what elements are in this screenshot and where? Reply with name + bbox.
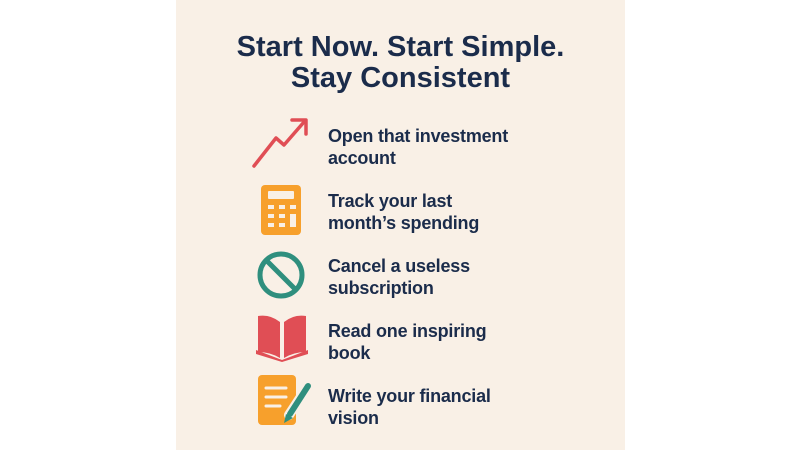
text: item 5 <box>328 386 491 428</box>
text: item 1 <box>328 126 508 168</box>
icon: document with pencil <box>258 375 308 425</box>
text: item 2: month’s spending <box>328 213 479 233</box>
text: item 4 <box>328 321 486 363</box>
icon: book <box>256 316 308 362</box>
title: Stay Consistent <box>291 62 510 94</box>
title <box>237 31 564 94</box>
text: item 5: vision <box>328 408 379 428</box>
text: item 4: Read one inspiring <box>328 321 486 341</box>
text: item 4: book <box>328 343 370 363</box>
text: item 5: Write your financial <box>328 386 491 406</box>
icon: rising arrow <box>254 120 306 166</box>
icons <box>252 118 311 425</box>
text: item 3: Cancel a useless <box>328 256 470 276</box>
text: item 2 <box>328 191 479 233</box>
text: item 3: subscription <box>328 278 434 298</box>
title: Start Now. Start Simple. <box>237 31 564 63</box>
panel: main <box>176 0 625 450</box>
text: item 2: Track your last <box>328 191 452 211</box>
icon: calculator <box>261 185 301 235</box>
icon: prohibited <box>260 254 302 296</box>
text: item 3 <box>328 256 470 298</box>
text: item 1: account <box>328 148 396 168</box>
text: item 1: Open that investment <box>328 126 508 146</box>
